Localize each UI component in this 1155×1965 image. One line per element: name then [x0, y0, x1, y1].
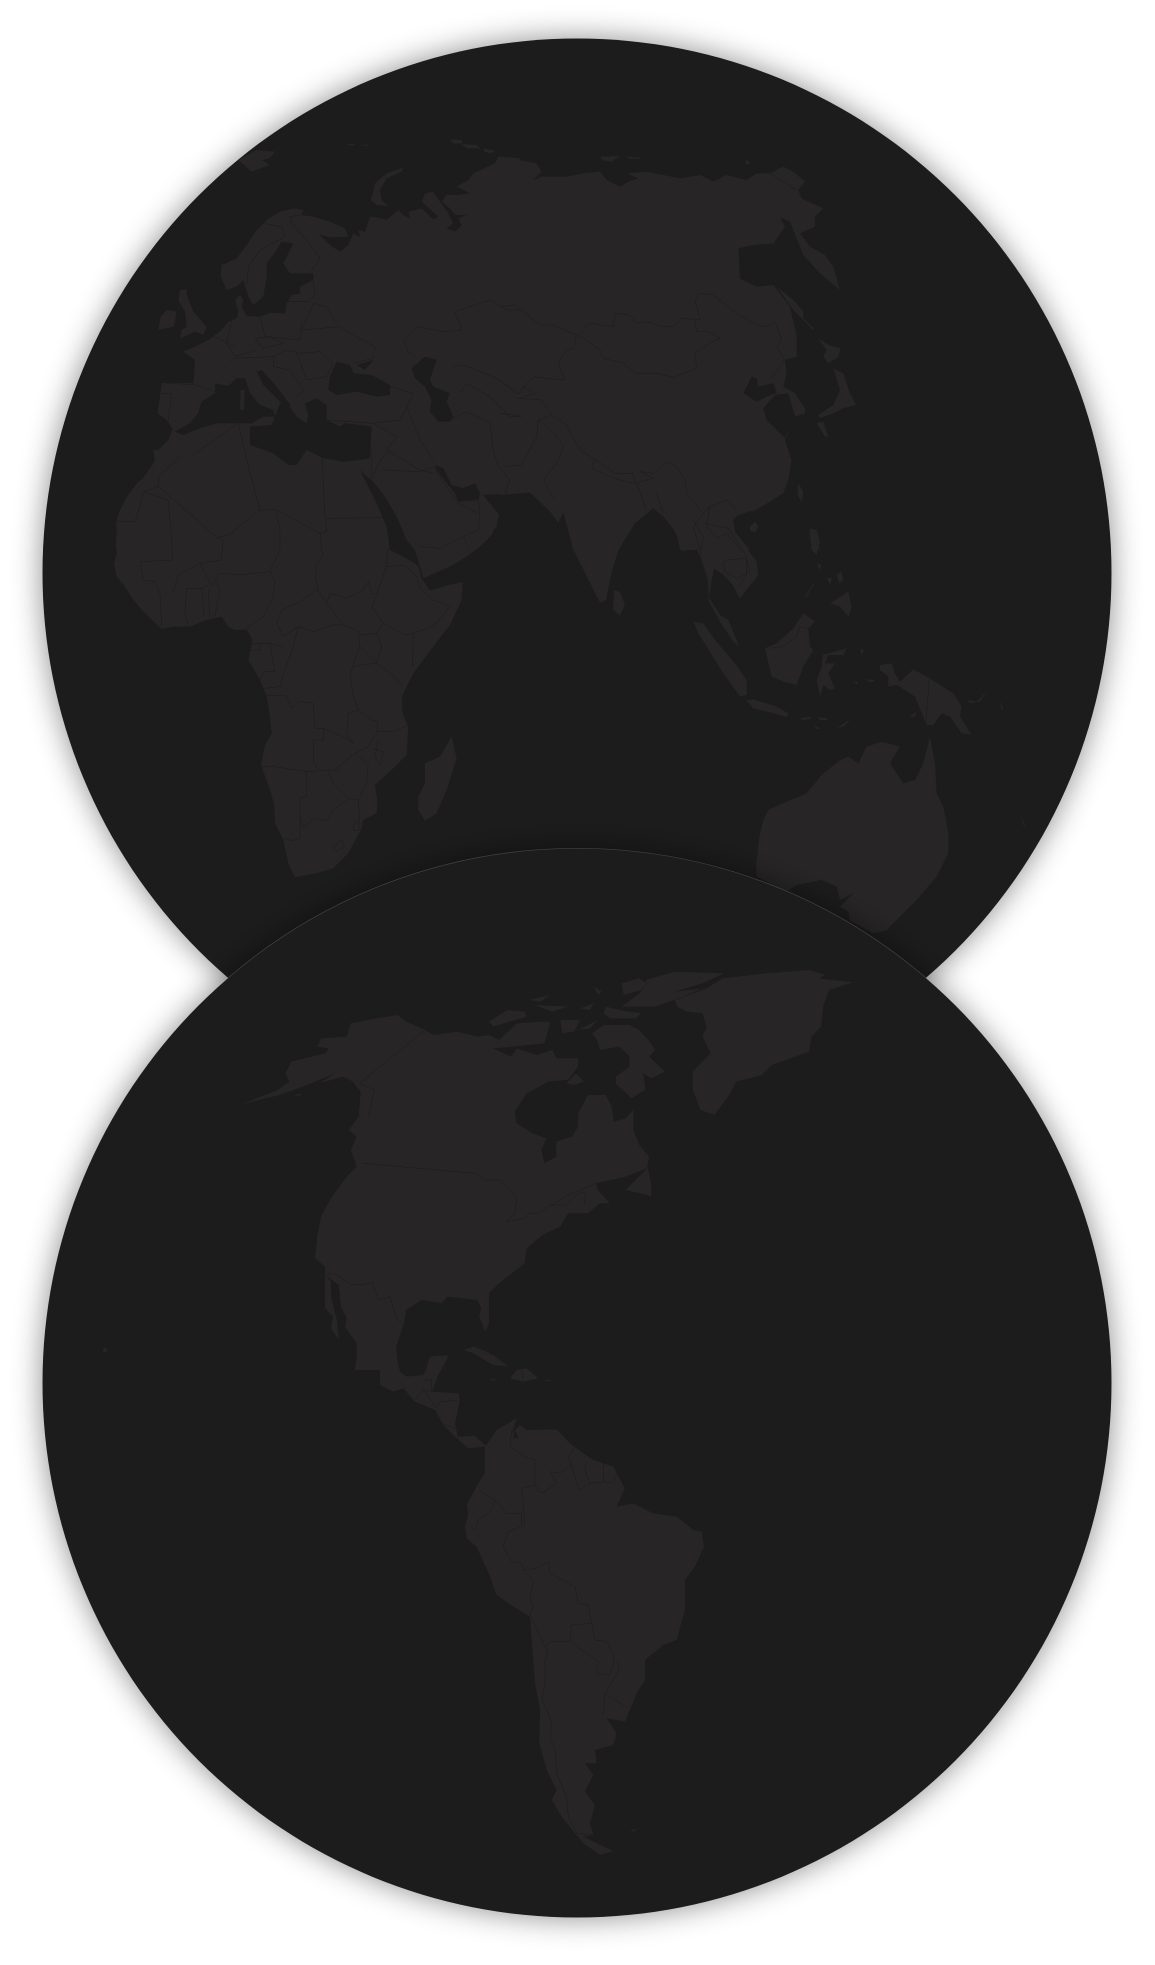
ocean disc: western hemisphere	[42, 848, 1112, 1918]
seas: southern Red Sea and Gulf of Aden	[390, 550, 463, 591]
landmass: Southeast Asia, Indonesia, New Guinea, Australia	[660, 500, 1027, 933]
borders: Africa and Arabia	[117, 450, 480, 852]
borders: Asia	[500, 173, 797, 550]
landmass: Central and South America	[380, 1350, 704, 1855]
island: Hawaii	[103, 1348, 107, 1352]
globe: western hemisphere	[42, 848, 1112, 1918]
seas: Mediterranean, Black Sea, Caspian, Red Sea, Gulf	[175, 357, 480, 550]
ocean disc: eastern hemisphere	[42, 38, 1112, 1108]
landmass: North America and Greenland	[240, 970, 853, 1370]
landmass: Europe, Middle East and Central Asia	[116, 139, 520, 550]
borders: Europe and Western Asia	[160, 215, 520, 510]
landmass: Africa and Arabia	[114, 450, 499, 877]
landmass: India south tip and Sri Lanka	[573, 549, 625, 615]
landmass: Russia, China and South Asia	[500, 156, 856, 550]
globe: eastern hemisphere	[42, 38, 1112, 1108]
seas: Arabian Sea, Bay of Bengal, Bohai and Yellow Sea	[500, 377, 795, 550]
rim highlight on upper edge of lower globe	[228, 848, 926, 978]
